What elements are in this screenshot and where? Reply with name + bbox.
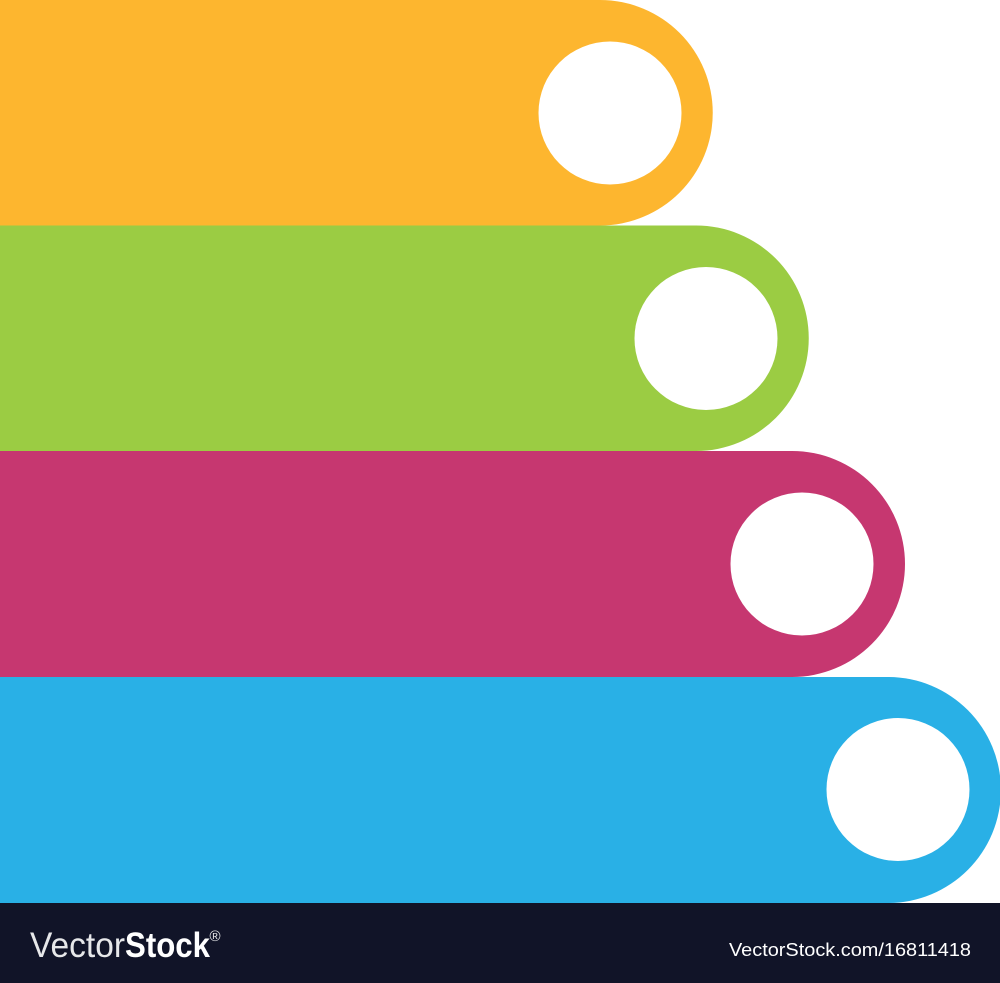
blue bar — [0, 677, 1000, 903]
registered mark: ® — [210, 928, 221, 945]
logo text: Vector: Vector — [30, 926, 125, 965]
magenta bar — [0, 451, 905, 677]
orange bar — [0, 0, 713, 226]
watermark footer — [0, 903, 1000, 983]
image id: VectorStock.com/16811418 — [729, 940, 971, 960]
green bar — [0, 226, 809, 451]
logo text: Stock: Stock — [125, 926, 210, 965]
